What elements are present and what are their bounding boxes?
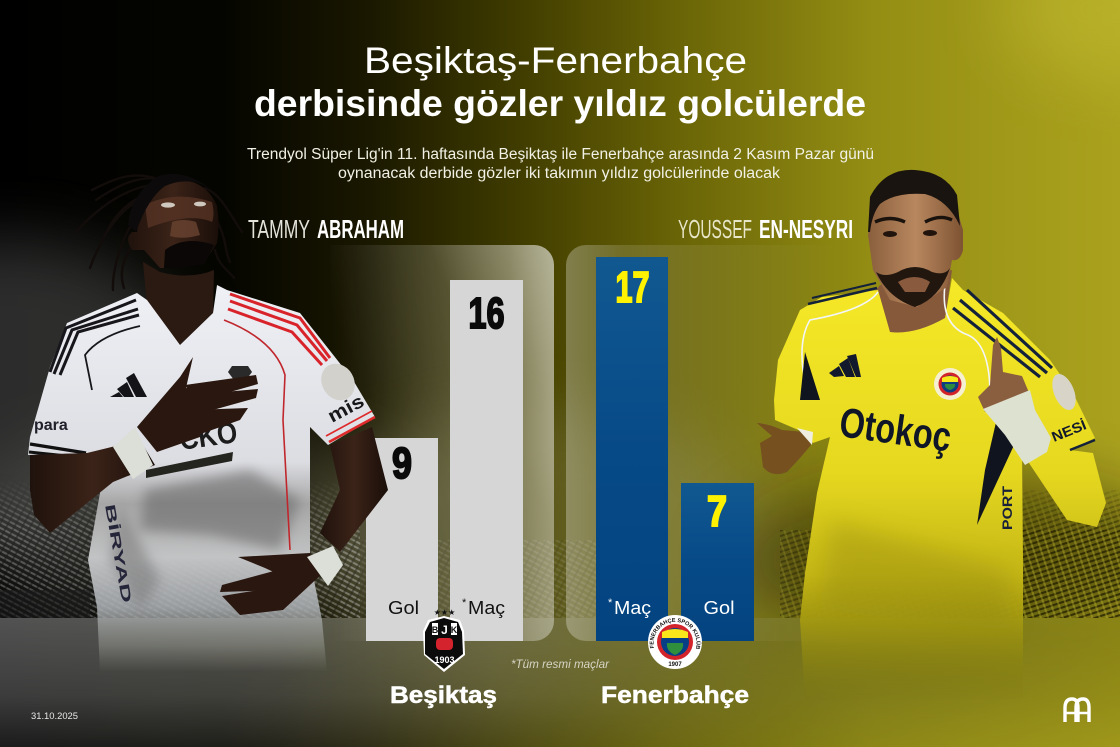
bar: Gol 7 — [681, 483, 754, 641]
bar: Gol 9: Gol — [388, 597, 419, 618]
player name: Tammy Abraham: TAMMY — [248, 214, 310, 244]
bandage — [983, 390, 1051, 465]
bar: Maç 16: Maç — [468, 597, 505, 618]
jersey sponsors — [34, 358, 368, 604]
player name: Youssef En-Nesyri: EN-NESYRI — [759, 214, 853, 244]
intro text — [247, 146, 874, 182]
neck — [143, 262, 214, 345]
bar chart: Beşiktaş — [366, 280, 523, 641]
icon: Beşiktaş crest: K — [451, 625, 458, 635]
bar: Maç 17: * — [608, 597, 613, 609]
bar: Maç 17: Maç — [614, 597, 651, 618]
neck — [872, 270, 952, 335]
beard and eyes — [875, 217, 952, 307]
intro text: oynanacak derbide gözler iki takımın yıldız golcülerinde olacak — [338, 165, 780, 182]
icon: Fenerbahçe crest: FENERBAHÇE SPOR KULÜBÜ — [650, 618, 702, 649]
hair — [76, 175, 242, 290]
bar: Maç 16: * — [462, 597, 467, 609]
left wristband — [797, 428, 813, 445]
right arm — [320, 427, 388, 552]
black side panels — [800, 352, 1015, 525]
jersey sponsors: NESİ — [1049, 416, 1089, 445]
intro text: Trendyol Süper Lig'in 11. haftasında Beşiktaş ile Fenerbahçe arasında 2 Kasım Pazar günü — [247, 146, 874, 163]
jersey sponsors: Otokoç — [837, 398, 954, 460]
face highlights — [145, 197, 214, 268]
player: Youssef En-Nesyri — [757, 170, 1106, 700]
icon: Beşiktaş crest: 1903 — [434, 655, 455, 665]
icon: Beşiktaş crest: ★★★ — [434, 608, 455, 617]
bar: Gol 7: Gol — [704, 597, 734, 618]
player name: Tammy Abraham: ABRAHAM — [317, 214, 404, 244]
head — [128, 180, 218, 268]
jersey sponsors: mis — [324, 391, 368, 427]
jersey — [28, 285, 375, 672]
adidas mark — [110, 373, 147, 397]
bar: Gol 9: 9 — [392, 439, 412, 488]
jersey crest — [934, 368, 966, 400]
panel: Beşiktaş background — [330, 245, 554, 641]
icon: Beşiktaş crest — [423, 608, 465, 672]
hair — [868, 170, 960, 232]
title: Beşiktaş-Fenerbahçe — [364, 40, 747, 81]
wristbands — [113, 427, 343, 586]
left hand — [757, 423, 811, 474]
jersey stripes and trim — [29, 294, 375, 550]
panel: Fenerbahçe background — [566, 245, 850, 641]
icon: Beşiktaş crest: B — [432, 625, 439, 635]
icon: AA logo — [1065, 699, 1089, 722]
footnote: *Tüm resmi maçlar — [511, 659, 610, 671]
title: derbisinde gözler yıldız golcülerde — [254, 83, 866, 124]
right hand — [978, 337, 1030, 412]
jersey — [774, 278, 1106, 700]
bar: Maç 16 — [450, 280, 523, 641]
bar: Gol 7: 7 — [707, 487, 727, 536]
jersey sponsors: para — [34, 417, 68, 434]
left hand — [137, 357, 258, 452]
icon: Fenerbahçe crest: 1907 — [668, 662, 682, 668]
jersey sponsors — [837, 371, 1089, 530]
right hand — [220, 553, 323, 615]
player name: Youssef En-Nesyri: YOUSSEF — [678, 214, 752, 244]
bar chart: Fenerbahçe — [596, 257, 754, 641]
team label: Beşiktaş: Beşiktaş — [390, 682, 497, 709]
jersey sponsors: PORT — [999, 485, 1015, 530]
jersey shadow — [820, 520, 1010, 630]
bar: Maç 17 — [596, 257, 668, 641]
player name: Tammy Abraham — [248, 214, 404, 244]
left arm — [30, 440, 155, 533]
icon: Beşiktaş crest: J — [441, 623, 448, 637]
jersey sponsors: BİRYAD — [102, 503, 135, 604]
jersey shadows — [110, 470, 300, 610]
bar: Maç 17: 17 — [616, 263, 650, 312]
team label: Fenerbahçe: Fenerbahçe — [601, 682, 749, 709]
headband — [128, 174, 212, 232]
icon: Fenerbahçe crest — [648, 615, 702, 669]
head — [868, 175, 963, 307]
bar: Maç 16: 16 — [468, 289, 504, 338]
date: 31.10.2025 — [31, 711, 78, 722]
title — [254, 40, 866, 124]
jersey sponsors: CKO — [177, 416, 239, 457]
bar: Gol 9 — [366, 438, 438, 641]
jersey stripes and trim — [802, 283, 1095, 450]
player: Tammy Abraham — [28, 174, 388, 672]
adidas mark — [829, 354, 861, 377]
